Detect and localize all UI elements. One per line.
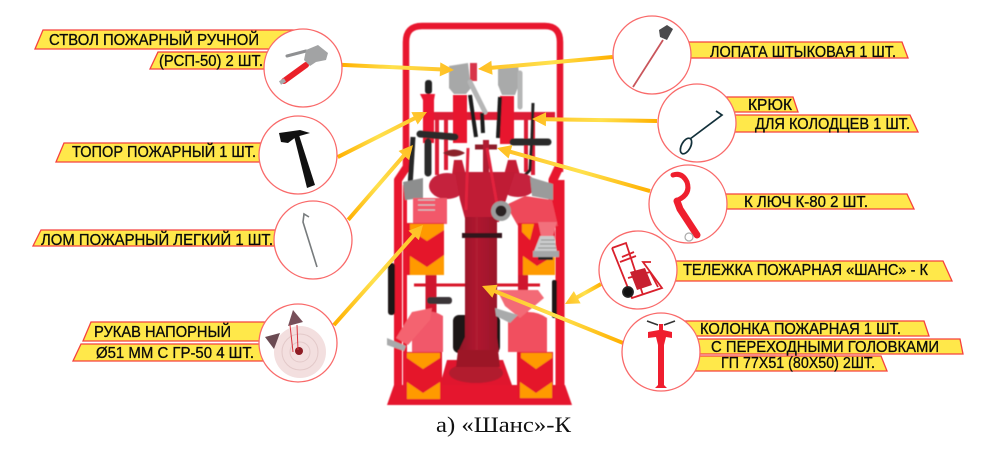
callout: hose: Ø51 ММ С ГР-50 4 ШТ.	[96, 345, 254, 362]
callout: column: ГП 77Х51 (80Х50) 2ШТ.	[721, 355, 875, 372]
callout: crowbar	[33, 201, 352, 279]
arrow: nozzle	[342, 58, 454, 77]
lower right hose box	[517, 352, 553, 399]
callout: shovel: ЛОПАТА ШТЫКОВАЯ 1 ШТ.	[710, 44, 896, 61]
caption: а) «Шанс»-К	[436, 412, 571, 437]
hydrant column	[429, 140, 536, 383]
arrow: cart	[562, 278, 604, 310]
callout: hose: РУКАВ НАПОРНЫЙ	[94, 323, 231, 341]
cart frame	[398, 26, 560, 385]
couplings and hoses	[387, 177, 558, 352]
callout: nozzle: (РСП-50) 2 ШТ.	[159, 53, 263, 70]
arrow: axe	[335, 106, 430, 163]
callout: axe: ТОПОР ПОЖАРНЫЙ 1 ШТ.	[72, 143, 256, 161]
base plate	[387, 360, 572, 405]
icon: axe	[279, 130, 315, 188]
icon: well hook	[678, 111, 722, 156]
callout: column: С ПЕРЕХОДНЫМИ ГОЛОВКАМИ	[711, 339, 939, 356]
arrow: column	[479, 280, 626, 349]
callout: key: К ЛЮЧ К-80 2 ШТ.	[744, 194, 868, 211]
callout: hose	[73, 304, 337, 382]
arrow: hook	[532, 112, 657, 128]
upper left hose box	[407, 223, 444, 275]
arrow: crowbar	[343, 140, 418, 224]
icon: column	[647, 321, 675, 388]
icon: hose roll	[265, 310, 326, 378]
icon: nozzle	[280, 45, 328, 83]
callout: crowbar: ЛОМ ПОЖАРНЫЙ ЛЕГКИЙ 1 ШТ.	[41, 231, 273, 249]
callout: well hook	[658, 84, 918, 162]
callout: well hook: КРЮК	[748, 97, 792, 114]
stored tools on frame	[410, 63, 548, 187]
arrow: shovel	[477, 50, 613, 76]
icon: shovel	[633, 25, 673, 87]
icon: cart	[612, 243, 662, 298]
callout: cart	[599, 231, 952, 309]
callout: nozzle: СТВОЛ ПОЖАРНЫЙ РУЧНОЙ	[49, 31, 259, 49]
callout: cart: ТЕЛЕЖКА ПОЖАРНАЯ «ШАНС» - К	[683, 262, 928, 279]
callout: column	[622, 313, 963, 391]
arrow: key	[495, 141, 652, 198]
fire cart illustration	[387, 26, 572, 405]
callout: nozzle	[35, 29, 342, 107]
callout: column: КОЛОНКА ПОЖАРНАЯ 1 ШТ.	[700, 321, 901, 338]
callout: shovel	[613, 16, 908, 94]
icon: crowbar	[303, 214, 317, 267]
callout: key	[649, 165, 914, 243]
arrow: hose	[329, 220, 428, 330]
callout: axe	[56, 116, 337, 194]
wheels and rear tank	[388, 263, 557, 353]
upper right hose box	[518, 222, 559, 275]
callout: well hook: ДЛЯ КОЛОДЦЕВ 1 ШТ.	[755, 116, 910, 133]
lower left hose box	[406, 352, 442, 400]
icon: key	[673, 174, 697, 241]
